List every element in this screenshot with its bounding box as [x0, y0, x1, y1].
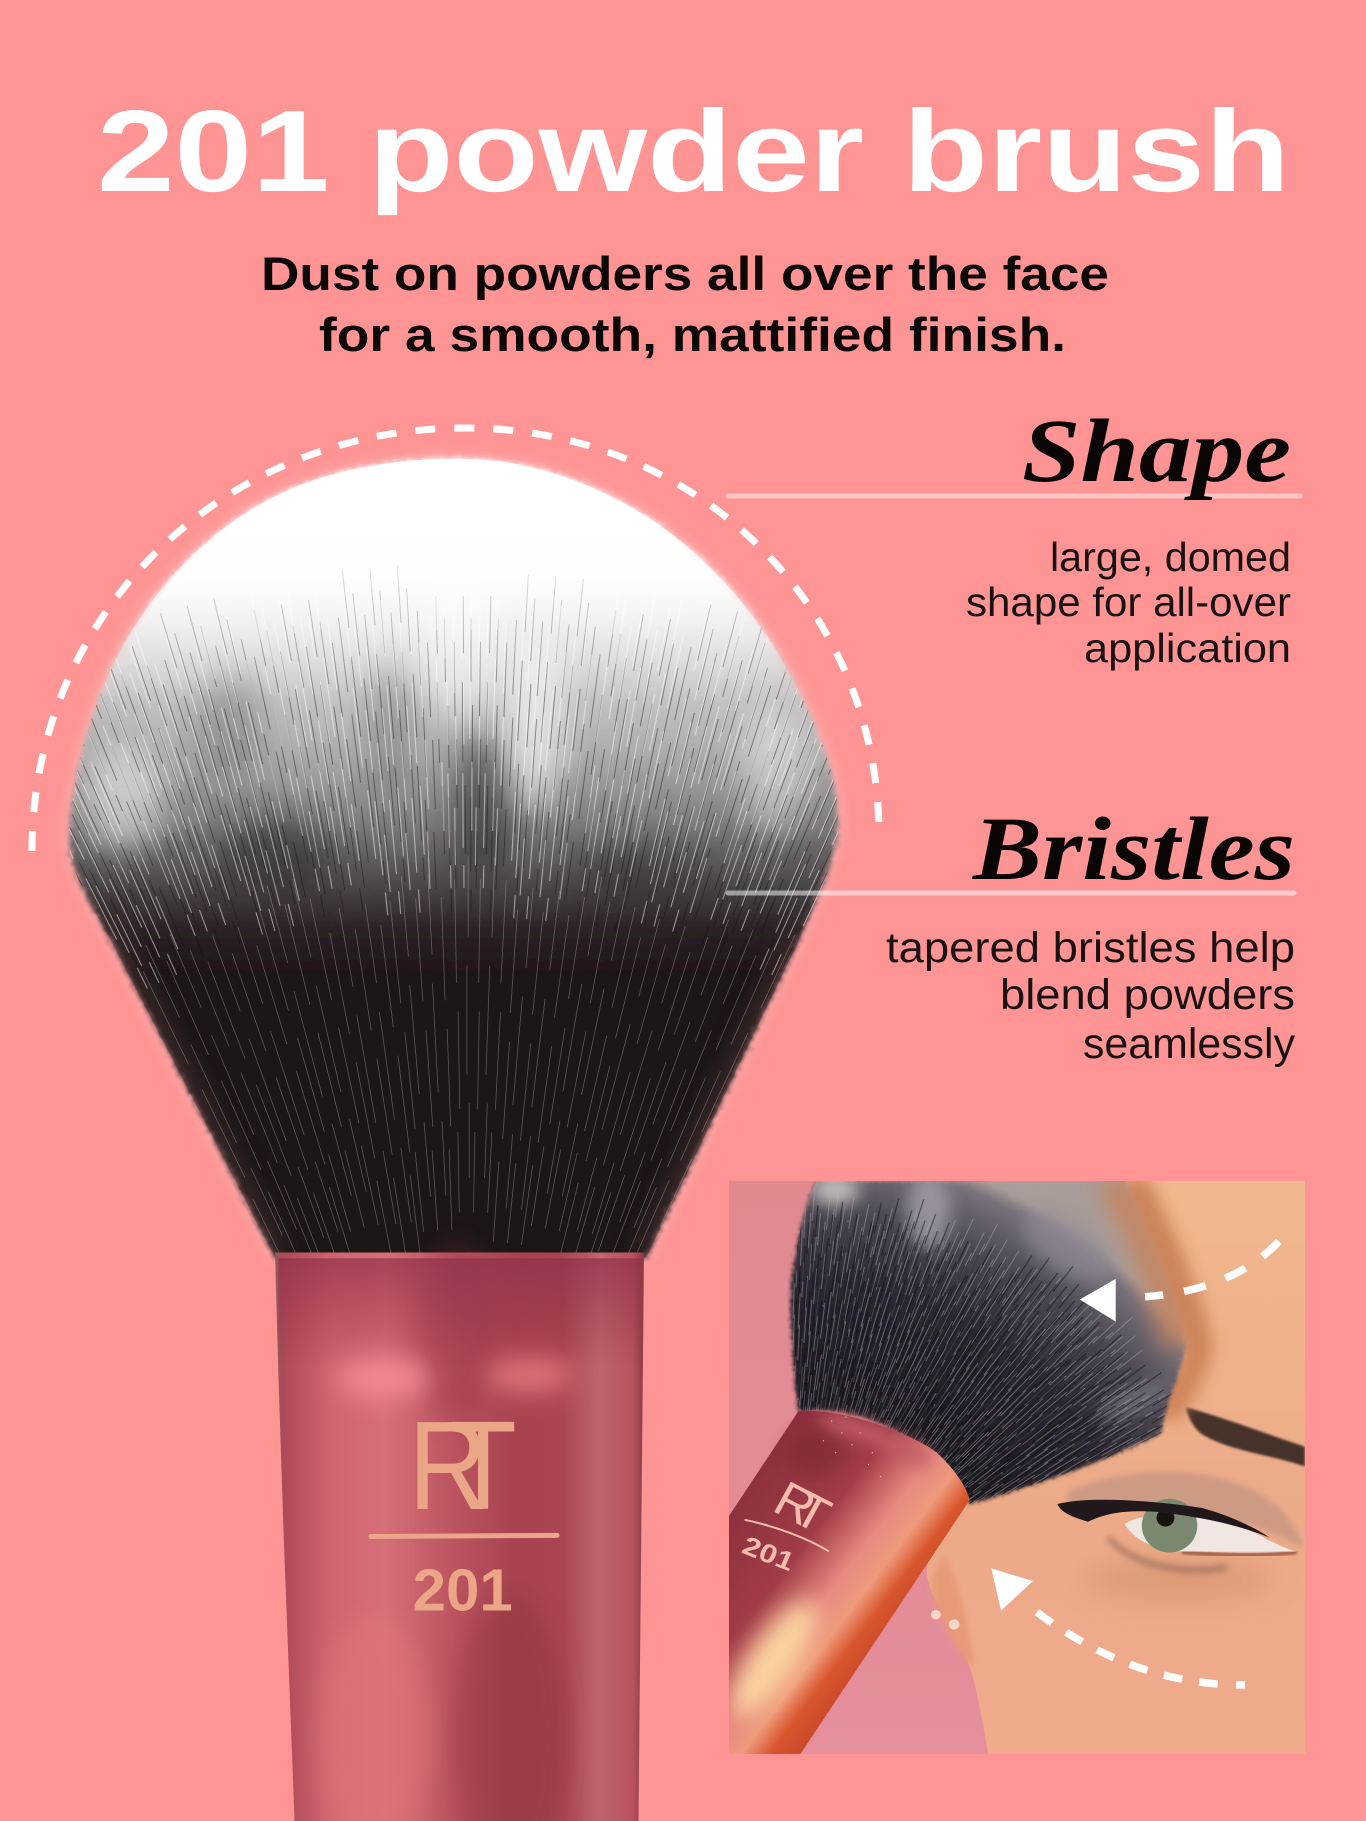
- subtitle: Dust on powders all over the face: [261, 247, 1109, 300]
- text: bristles description: [886, 924, 1295, 1068]
- title: 201 powder brush: [97, 86, 1290, 216]
- bristle tonal patches and hair strands: [0, 437, 950, 1277]
- divider: bristles: [728, 890, 1294, 896]
- eyebrow: [1186, 1407, 1305, 1467]
- subtitle: [261, 247, 1109, 361]
- heading: Bristles: Bristles: [972, 800, 1295, 899]
- bristle body: [69, 459, 838, 1258]
- heading: Shape: Shape: [1022, 402, 1291, 501]
- text: shape description: large, domed: [1050, 534, 1291, 580]
- text: shape description: [966, 534, 1291, 671]
- handle body: [275, 1253, 644, 1821]
- handle highlight: [717, 1590, 830, 1726]
- eye: [1057, 1472, 1305, 1570]
- dashed dome outline: [32, 428, 879, 851]
- arrow: top dashed: [1080, 1241, 1279, 1322]
- inset model number: 201: [738, 1530, 799, 1577]
- text: shape description: shape for all-over: [966, 579, 1291, 625]
- handle shading and highlights: [277, 1247, 643, 1821]
- inset logo: RT: RT: [765, 1470, 840, 1544]
- divider: shape: [728, 494, 1300, 498]
- face skin: [927, 1181, 1305, 1754]
- photo background: [729, 1181, 1305, 1754]
- arrow: bottom dashed: [991, 1568, 1245, 1685]
- text: bristles description: tapered bristles help: [886, 924, 1295, 972]
- inset photo: brush applied to face: [729, 1181, 1305, 1754]
- under-eye shading: [1084, 1559, 1272, 1599]
- ear and earring: [931, 1555, 974, 1668]
- handle model number: 201: [413, 1557, 513, 1623]
- bristle tip shadow on skin: [1133, 1181, 1198, 1417]
- handle logo divider: [371, 1535, 557, 1536]
- inset logo divider: [745, 1520, 829, 1551]
- brush bristle head: [63, 452, 844, 1262]
- text: shape description: application: [1084, 625, 1291, 671]
- inset bristles: [786, 1181, 1189, 1507]
- handle logo: RT: RT: [408, 1396, 517, 1537]
- inset brush handle: [717, 1411, 970, 1754]
- subtitle: for a smooth, mattified finish.: [319, 308, 1066, 361]
- handle top sheen: [823, 1421, 929, 1465]
- text: bristles description: seamlessly: [1083, 1020, 1295, 1068]
- handle dark patch: [786, 1429, 843, 1476]
- powder sparkles: [823, 1417, 881, 1476]
- text: bristles description: blend powders: [1000, 971, 1295, 1019]
- bristle halo: [69, 459, 838, 1258]
- brush handle: [275, 1247, 644, 1821]
